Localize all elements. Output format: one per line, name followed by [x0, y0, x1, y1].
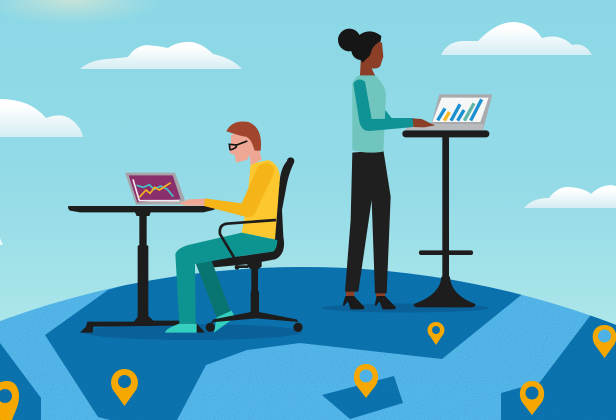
shadow under standing woman — [321, 304, 489, 312]
neck and head — [226, 121, 262, 165]
standing woman at tall table — [338, 29, 492, 309]
cloud: top centre-left — [80, 42, 242, 69]
pin: lower left — [111, 369, 138, 406]
torso: yellow sweater — [242, 160, 280, 239]
laptop: line chart — [125, 173, 186, 205]
seated man at desk — [68, 121, 303, 333]
trousers — [345, 150, 391, 293]
thigh and front leg — [175, 233, 277, 323]
cloud: left edge — [0, 99, 83, 137]
sun glow — [0, 0, 162, 26]
back leg — [195, 258, 231, 319]
glasses — [229, 141, 247, 150]
pin: lower right — [520, 381, 544, 415]
hand — [179, 199, 205, 206]
globe — [0, 260, 616, 420]
near arm — [353, 80, 413, 131]
chair column and base — [206, 259, 303, 332]
cloud: tiny left edge — [0, 238, 3, 245]
continent: main — [45, 262, 525, 420]
surface grain — [0, 288, 590, 420]
continent: island — [322, 376, 403, 419]
heeled shoes — [343, 296, 396, 309]
far arm — [384, 108, 413, 123]
pin: centre lower — [354, 364, 378, 398]
shadow under seated man — [82, 324, 302, 340]
continent: right — [501, 312, 616, 420]
armrest — [220, 220, 276, 257]
laptop: bar chart — [406, 94, 492, 130]
back shoe — [214, 311, 235, 333]
pin: far right — [593, 325, 616, 358]
front shoe — [165, 324, 197, 333]
chair back and seat — [203, 157, 294, 268]
ankles — [346, 291, 385, 297]
cloud: top right — [441, 22, 592, 55]
sweater — [352, 75, 386, 153]
hand — [413, 118, 435, 127]
desk — [68, 206, 216, 333]
hair bun — [338, 29, 381, 63]
pin: centre upper — [428, 322, 444, 345]
tall table — [402, 130, 489, 307]
ocean — [0, 260, 616, 420]
continent: left — [0, 343, 41, 420]
cloud: right edge — [524, 185, 616, 208]
neck and head — [360, 39, 383, 75]
arm — [204, 163, 274, 217]
pin: left edge — [0, 381, 19, 420]
hair — [226, 121, 261, 151]
